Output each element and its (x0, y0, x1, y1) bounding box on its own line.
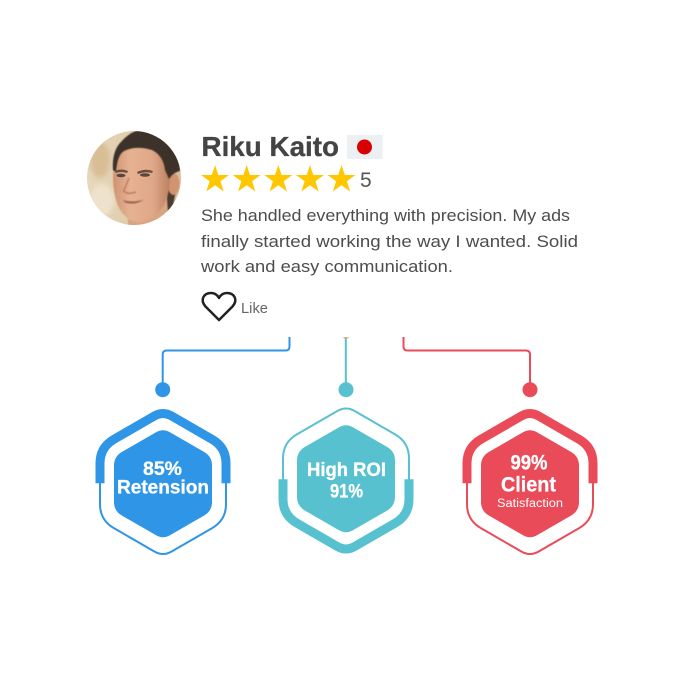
star rating (201, 165, 356, 192)
badge: high ROI: 91% (330, 480, 363, 502)
badge: high ROI (283, 408, 409, 549)
badge: client satisfaction: Satisfaction (497, 498, 563, 510)
badge: high ROI: High ROI (307, 459, 386, 481)
connector: red (404, 337, 538, 397)
badge: client satisfaction: Client (501, 472, 556, 496)
badge: retention: Retension (117, 476, 209, 498)
review text (200, 207, 578, 276)
review text: She handled everything with precision. My ads (201, 207, 570, 225)
badge: retention (100, 414, 226, 554)
icon: heart (203, 293, 235, 320)
like label: Like (241, 301, 268, 317)
badge: client satisfaction (467, 414, 593, 554)
badge: retention: 85% (143, 459, 182, 480)
badge: client satisfaction: 99% (510, 451, 548, 474)
avatar photo (87, 130, 181, 228)
review text: work and easy communication. (200, 258, 453, 276)
connector: teal (338, 337, 354, 397)
connector: blue (155, 337, 290, 397)
rating number: 5 (360, 169, 372, 192)
icon: Japan flag (347, 135, 382, 159)
reviewer name: Riku Kaito (202, 131, 339, 162)
review text: finally started working the way I wanted. Solid (201, 233, 578, 251)
